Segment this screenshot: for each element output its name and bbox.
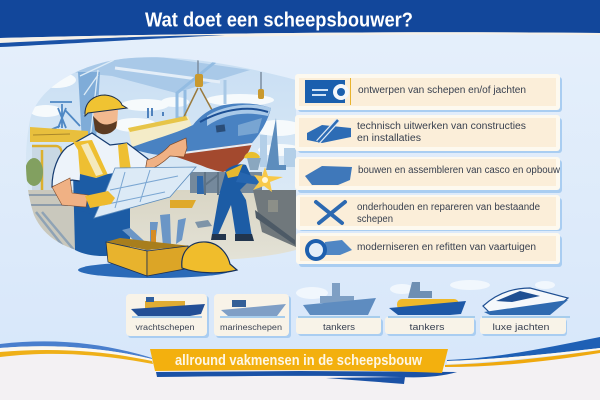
header band [0,0,600,47]
hi-vis vest [73,140,131,178]
panel: ontwerpen: ontwerpen van schepen en/of jachten [358,85,526,96]
ship types [126,280,570,338]
yard buildings left [30,127,88,142]
overalls [73,170,130,256]
card: luxe jachten: luxe jachten [492,322,550,332]
card: marineschepen [214,294,291,338]
toolbox and helmet [78,214,237,278]
icon: yacht [482,288,570,317]
structure right [253,190,296,247]
card: luxe jachten [480,288,570,336]
panel: technisch uitwerken: en installaties [357,133,421,144]
tools [122,214,186,251]
panel: onderhouden: onderhouden en repareren van bestaande [357,202,540,213]
helmet [85,95,127,116]
icon: hull [305,166,352,185]
icon: tanker [388,282,475,317]
card: tankers 1: tankers [323,322,356,332]
panel: moderniseren: moderniseren en refitten van vaartuigen [357,242,536,253]
scaffold under ship [205,172,218,195]
icon: compass and boat [305,239,352,261]
card: tankers 1 [296,283,383,336]
panel: technisch uitwerken: technisch uitwerken van constructies [357,121,526,132]
panel: technisch uitwerken [295,115,562,153]
icon: frigate [298,283,380,317]
main worker [52,95,196,256]
banner: allround vakmensen in de scheepsbouw [175,352,422,369]
panel: moderniseren [296,233,562,267]
panel: onderhouden [296,195,562,231]
ship [128,103,271,172]
blueprint [94,167,196,218]
distant tower crane [50,102,80,130]
icon: naval ship [220,300,286,317]
icon: crossed wrenches [316,202,345,223]
gloves [85,191,115,208]
shipyard ground [28,190,296,260]
title: Wat doet een scheepsbouwer? [145,10,413,32]
card: tankers 2: tankers [410,322,445,332]
panel: bouwen [295,157,562,193]
icon: cargo ship [131,297,205,317]
banner [150,349,457,384]
sky [26,58,296,170]
left forearm [52,178,88,207]
welding spark [253,167,283,192]
card: vrachtschepen [126,294,209,338]
toolbox [106,238,190,250]
pointing arm [145,138,187,172]
panel: onderhouden: schepen [357,214,393,225]
icon: blueprint gear [305,78,351,105]
hoist hooks [183,60,264,117]
hard hat [182,242,237,273]
shirt [52,133,148,187]
panel: ontwerpen [295,74,562,112]
bottom wave [0,337,600,400]
clouds [30,72,303,156]
panel: bouwen: bouwen en assembleren van casco en opbouw [358,165,561,176]
gantry crane roof [76,57,250,136]
small worker [197,176,204,194]
head [93,110,118,133]
card: vrachtschepen: vrachtschepen [136,323,194,332]
distant skyline [260,135,296,167]
bib [78,170,131,215]
task list [295,74,562,267]
card: tankers 2 [385,282,476,336]
illustration: shipyard scene [26,57,296,260]
welder [211,152,283,241]
card: marineschepen: marineschepen [220,323,282,332]
clouds behind ships [296,280,555,299]
icon: wrench on block [307,120,351,143]
